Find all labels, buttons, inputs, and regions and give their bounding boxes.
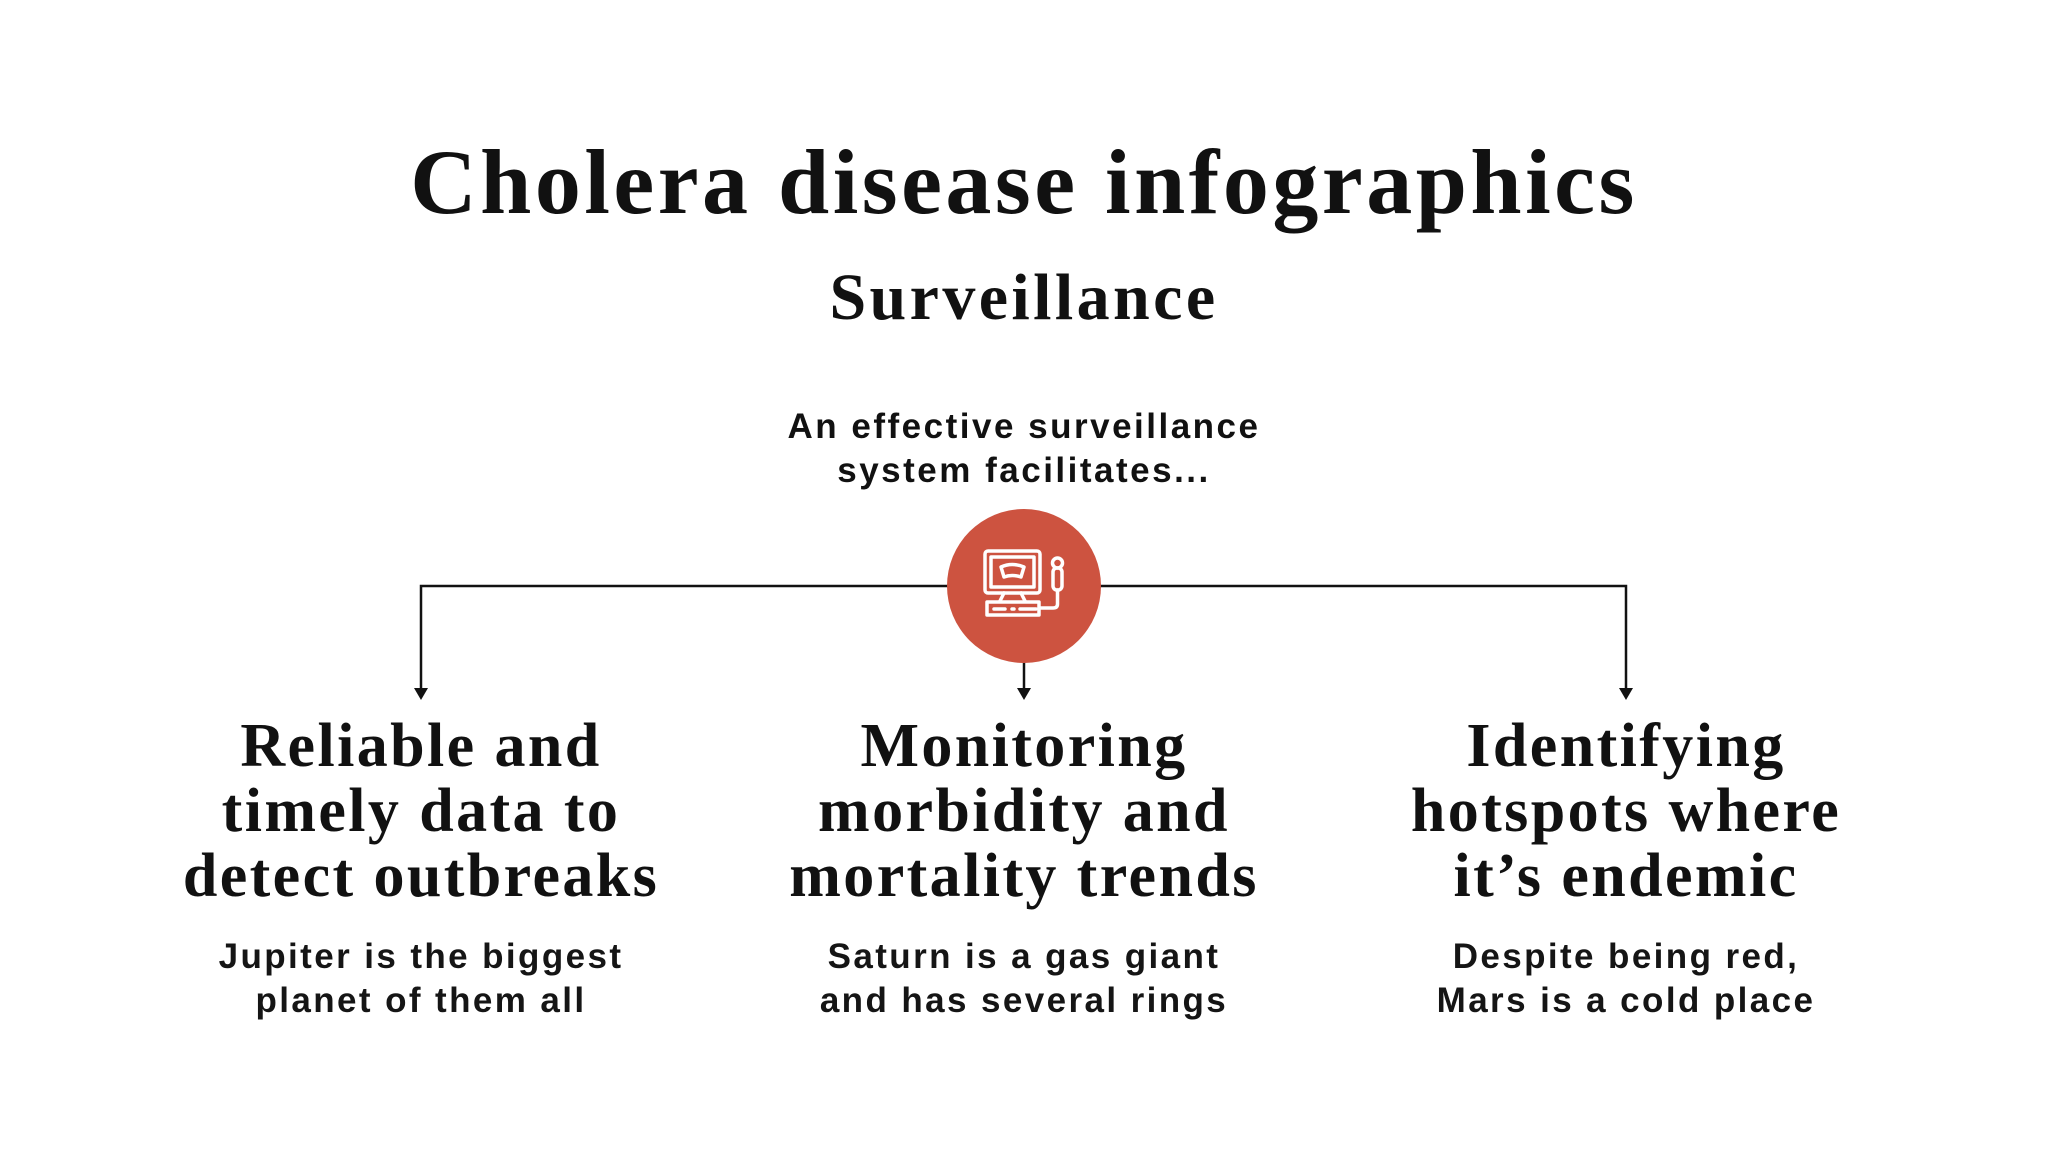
- column 2 heading: morbidity and: [818, 777, 1230, 845]
- column 3 heading: it’s endemic: [1453, 842, 1799, 910]
- title: Cholera disease infographics: [410, 131, 1638, 233]
- subtitle: Surveillance: [829, 261, 1219, 334]
- column 2 text: [820, 937, 1228, 1020]
- column 3 text: [1437, 937, 1815, 1020]
- intro text: An effective surveillance: [788, 407, 1260, 446]
- icon: surveillance monitor in red circle: [947, 509, 1101, 663]
- column 3 heading: Identifying: [1466, 712, 1786, 780]
- column 1 heading: Reliable and: [240, 712, 602, 780]
- column 2 text: and has several rings: [820, 981, 1228, 1020]
- column 2 heading: Monitoring: [860, 712, 1188, 780]
- column 3 heading: hotspots where: [1411, 777, 1841, 845]
- column 1 text: Jupiter is the biggest: [219, 937, 623, 976]
- column 1 heading: [183, 712, 659, 910]
- column 1 text: [219, 937, 623, 1020]
- intro text: system facilitates...: [837, 451, 1211, 490]
- column 2 heading: [789, 712, 1259, 910]
- column 3 text: Mars is a cold place: [1437, 981, 1815, 1020]
- column 1 heading: timely data to: [222, 777, 620, 845]
- column 3 heading: [1411, 712, 1841, 910]
- column 1 heading: detect outbreaks: [183, 842, 659, 910]
- column 3 text: Despite being red,: [1453, 937, 1799, 976]
- column 1 text: planet of them all: [255, 981, 586, 1020]
- column 2 text: Saturn is a gas giant: [828, 937, 1220, 976]
- column 2 heading: mortality trends: [789, 842, 1259, 910]
- intro text: [788, 407, 1260, 490]
